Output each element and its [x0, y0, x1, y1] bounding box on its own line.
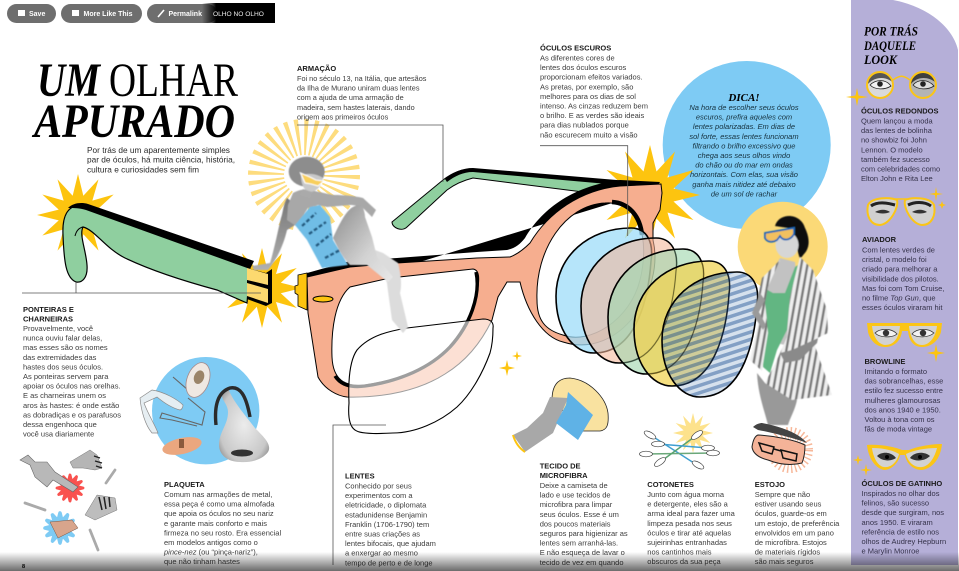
text: óculos redondos: ÓCULOS REDONDOS [861, 106, 939, 116]
text: aviador: visibilidade dos pilotos. [862, 274, 939, 283]
text: estojo: de materiais rígidos [755, 548, 820, 557]
leader line: lentes [333, 425, 386, 565]
tip text: dica: ganha mais nitidez até debaixo [692, 180, 796, 189]
text: armação: da Ilha de Murano uniram duas lentes [297, 84, 420, 93]
torso and bent arm [287, 189, 376, 226]
text: óculos de gatinho: e Marylin Monroe [862, 547, 919, 556]
text: ponteiras e charneiras: dessa engenhoca que [23, 420, 97, 429]
text: ponteiras e charneiras: apoiar os óculos nas orelhas. [23, 382, 121, 391]
yellow stars behind the frame [37, 145, 700, 328]
sidebar heading: POR TRÁS [864, 24, 918, 38]
text: tecido de microfibra: E não esqueça de lavar o [540, 548, 625, 557]
text: estojo: um estojo, de preferência [755, 519, 840, 528]
text: armação [297, 64, 427, 121]
text: aviador: no filme Top Gun, que [862, 294, 936, 302]
text: lentes: tempo de perto e de longe [345, 558, 433, 567]
text: plaqueta: PLAQUETA [164, 480, 205, 489]
big glasses frame [295, 180, 662, 397]
title: APURADO [31, 95, 235, 148]
text: armação: Foi no século 13, na Itália, que artesãos [297, 74, 427, 83]
text: estojo: envolvidos em um pano [755, 528, 834, 537]
text: ponteiras e charneiras: As ponteiras servem para [23, 372, 109, 381]
text: tecido de microfibra [540, 462, 628, 567]
text: estojo: Sempre que não [755, 490, 810, 499]
sidebar heading: DAQUELE [863, 39, 916, 53]
text: óculos escuros: proporcionam efeitos variados. [540, 73, 643, 82]
text: óculos escuros: As diferentes cores de [540, 54, 615, 62]
text: óculos escuros: para dias nublados porque [540, 121, 629, 130]
lens being wiped by hand with cloth [513, 378, 608, 452]
leader line: ponteiras [22, 282, 261, 293]
text: aviador: cristal, o modelo foi [862, 255, 927, 264]
text: cotonetes: limpeza pesada nos seus [647, 519, 732, 528]
text: ponteiras e charneiras: você usa diariamente [23, 430, 94, 439]
tip text: dica: horizontais. Com elas, sua visão [690, 170, 798, 179]
text: tecido de microfibra: tecido de vez em quando [540, 558, 624, 567]
patterned swimsuit [295, 205, 348, 268]
tip text: dica: Na hora de escolher seus óculos [689, 103, 799, 112]
legs [757, 373, 797, 425]
text: óculos redondos: Elton John e Rita Lee [861, 174, 933, 183]
text: óculos de gatinho: anos 1950. E viraram [862, 518, 933, 527]
icon: aviator glasses [868, 198, 934, 225]
text: lentes: Franklin (1706-1790) tem [345, 520, 429, 529]
text: estojo [755, 480, 840, 566]
text: ponteiras e charneiras: nunca ouviu falar delas, [23, 334, 102, 343]
text: aviador: Mas foi com Tom Cruise, [862, 284, 944, 293]
intro text: par de óculos, há muita ciência, história, [87, 155, 235, 165]
icon: browline glasses [867, 323, 942, 347]
text: armação: ARMAÇÃO [297, 64, 336, 73]
arm in pocket [780, 338, 818, 363]
far leg [357, 247, 408, 333]
text: estojo: óculos, guarde-os em [755, 509, 827, 518]
text: cotonetes: óculos e tirar até aquelas [647, 528, 731, 537]
text: estojo: ESTOJO [755, 480, 785, 489]
seated woman photo [252, 157, 408, 333]
text: plaqueta: e garante mais conforto e mais [164, 519, 267, 528]
text: plaqueta [163, 480, 281, 566]
sunburst behind seated woman [266, 137, 342, 213]
text: tecido de microfibra: lentes sem arranhá-las. [540, 539, 618, 548]
text: cotonetes: COTONETES [647, 480, 694, 489]
text: óculos redondos: também fez sucesso [861, 155, 930, 164]
text: armação: madeira, sem hastes laterais, dando [297, 103, 415, 112]
text: óculos de gatinho: ÓCULOS DE GATINHO [862, 479, 942, 488]
text: browline: estilo fez sucesso entre [864, 386, 943, 395]
intro text: cultura e curiosidades sem fim [87, 164, 199, 174]
text: lentes: a enxergar ao mesmo [345, 549, 418, 558]
text: lentes: lentes bifocais, que ajudam [345, 539, 436, 548]
leader line: óculos escuros [540, 146, 628, 236]
text: browline: dos anos 1940 e 1950. [864, 405, 941, 414]
tip text: dica: chega aos seus olhos vindo [698, 151, 790, 160]
text: tecido de microfibra: MICROFIBRA [540, 471, 588, 480]
text: aviador: Com lentes verdes de [862, 246, 935, 254]
sidebar heading [863, 24, 918, 67]
sidebar sparkles [846, 88, 946, 476]
text: browline: BROWLINE [864, 357, 905, 366]
sidebar panel: por trás daquele look [851, 0, 958, 565]
right temple [392, 168, 640, 229]
torso skin [760, 258, 798, 345]
face [776, 232, 798, 258]
icon: round glasses [866, 72, 937, 98]
text: lentes: Conhecido por seus [345, 482, 412, 490]
sunglasses [765, 228, 794, 242]
text: óculos de gatinho: olhos de Audrey Hepburn [862, 537, 946, 546]
hair [775, 216, 809, 259]
text: ponteiras e charneiras: as dobradiças e os parafusos [23, 410, 121, 419]
lens outlines seen through the stack [581, 238, 730, 386]
text: cotonetes [647, 480, 736, 566]
text: tecido de microfibra: TECIDO DE [540, 462, 581, 470]
hinge hardware illustration [20, 450, 117, 550]
green swimsuit [763, 265, 798, 373]
text: cotonetes: sujeirinhas entranhadas [647, 538, 727, 547]
tip text: dica [689, 92, 799, 198]
toolbar buttons [7, 3, 275, 23]
toolbar buttons: Save [29, 11, 45, 18]
leader line: armação [297, 125, 443, 182]
near leg [333, 205, 393, 282]
tip text: dica: lentes polarizadas. Em dias de [693, 122, 795, 131]
text: óculos redondos: com celebridades como [861, 164, 940, 174]
text: estojo: são mais seguros [755, 557, 814, 566]
text: óculos escuros: o brilho. E as verdes são ideais [540, 111, 644, 120]
title: UM [37, 54, 102, 107]
text: ponteiras e charneiras [23, 305, 121, 439]
tip text: dica: do chão ou do mar em ondas [695, 161, 793, 170]
text: óculos escuros: ÓCULOS ESCUROS [540, 44, 611, 52]
text: tecido de microfibra: dos poucos materiais [540, 519, 611, 528]
sunglasses lens stack [556, 228, 758, 397]
text: ponteiras e charneiras: E as charneiras unem os [23, 391, 106, 400]
text: tecido de microfibra: microfibra para limpar [540, 500, 613, 509]
hair and face [289, 157, 325, 187]
text: lentes: entre suas criações as [345, 530, 420, 538]
icon: cat-eye glasses [867, 444, 942, 470]
sidebar heading: LOOK [863, 53, 899, 67]
text: óculos de gatinho: desde que surgiram, nos [862, 508, 944, 517]
text: ponteiras e charneiras: mas esses são os nomes [23, 343, 108, 352]
text: ponteiras e charneiras: PONTEIRAS E [23, 305, 74, 314]
nose pad illustration [140, 357, 269, 464]
text: plaqueta: pince-nez (ou “pinça-nariz”), [164, 548, 258, 557]
text: browline: das sobrancelhas, esse [864, 377, 943, 386]
text: estojo: estiver usando seus [755, 500, 822, 509]
text: lentes: estadunidense Benjamin [345, 510, 427, 519]
text: aviador: esses óculos viraram hit [862, 303, 943, 312]
tip text: dica: filtrando o brilho excessivo que [693, 141, 795, 150]
text: plaqueta: firmeza no seu rosto. Era essencial [164, 528, 281, 537]
yellow circle behind standing woman [738, 202, 828, 292]
bifocal lens outline [349, 319, 493, 434]
striped robe left [750, 260, 780, 371]
left temple: ponteira and hinge [63, 203, 272, 306]
standing woman photo [750, 216, 832, 425]
text: armação: com a ajuda de uma armação de [297, 93, 404, 102]
text: browline: fãs de moda vintage [864, 425, 932, 434]
text: cotonetes: arma ideal para fazer uma [647, 509, 736, 518]
text: aviador: AVIADOR [862, 235, 897, 244]
text: óculos escuros: As pretas, por exemplo, são [540, 82, 633, 91]
text: aviador [862, 235, 944, 312]
tip circle background [663, 61, 831, 229]
text: óculos redondos: no showbiz foi John [861, 136, 927, 145]
text: tecido de microfibra: Deixe a camiseta de [540, 481, 608, 490]
text: cotonetes: e detergente, eles são a [647, 500, 729, 509]
text: browline [864, 357, 943, 434]
text: plaqueta: que não tinham hastes [164, 557, 240, 566]
glasses case [752, 423, 807, 467]
text: armação: origem aos primeiros óculos [297, 112, 389, 121]
text: lentes [345, 472, 436, 567]
text: óculos escuros: melhores para os dias de sol [540, 92, 636, 101]
tip text: dica: escuros, prefira aqueles com [696, 113, 792, 122]
text: plaqueta: Comum nas armações de metal, [164, 490, 272, 499]
text: tecido de microfibra: seus óculos. Esse é um [540, 510, 619, 519]
title: OLHAR [109, 54, 238, 107]
text: óculos redondos: Quem lançou a moda [861, 116, 934, 126]
intro text: Por trás de um aparentemente simples [87, 145, 230, 155]
text: óculos de gatinho: referência de estilo nos [862, 527, 939, 536]
arm on hinge [252, 198, 296, 270]
text: plaqueta: essa peça é como uma almofada [164, 500, 275, 509]
text: plaqueta: que apoia os óculos no seu nariz [164, 509, 274, 518]
text: aviador: criado para melhorar a [862, 265, 938, 274]
sparkles near hand [499, 351, 522, 376]
toolbar buttons: Permalink [168, 11, 202, 18]
text: browline: Voltou à tona com os [864, 415, 935, 424]
striped robe right [765, 257, 832, 400]
text: cotonetes: nos cantinhos mais [647, 548, 712, 557]
text: óculos de gatinho [862, 479, 946, 556]
text: ponteiras e charneiras: CHARNEIRAS [23, 315, 73, 324]
text: cotonetes: Junto com água morna [647, 490, 725, 499]
text: óculos de gatinho: Inspirados no olhar dos [862, 489, 940, 498]
text: óculos escuros: lentes dos óculos escuros [540, 63, 627, 72]
toolbar buttons: More Like This [84, 11, 133, 18]
text: ponteiras e charneiras: aros às hastes: é onde estão [23, 401, 119, 410]
toolbar buttons: OLHO NO OLHO [213, 11, 264, 18]
text: browline: mulheres glamourosas [864, 396, 941, 405]
tip text: dica: sol forte, essas lentes funcionam [689, 132, 799, 141]
text: ponteiras e charneiras: das extremidades das [23, 353, 97, 362]
text: tecido de microfibra: lado e use tecidos de [540, 491, 611, 500]
text: óculos redondos: das lentes de bolinha [861, 126, 933, 135]
text: óculos de gatinho: felinos, são sucesso [862, 499, 929, 508]
text: plaqueta: em modelos antigos como o [164, 538, 258, 547]
text: lentes: LENTES [345, 472, 375, 480]
cotton swabs [640, 413, 720, 471]
text: cotonetes: obscuros da sua peça [647, 557, 722, 566]
text: tecido de microfibra: seguros para higienizar as [540, 529, 628, 538]
page number: 8 [22, 564, 25, 570]
text: óculos escuros [540, 44, 648, 139]
title [31, 54, 238, 148]
bottom page shadow [0, 552, 959, 571]
text: ponteiras e charneiras: hastes dos seus óculos. [23, 362, 103, 371]
tip text: dica: de um sol de rachar [711, 189, 778, 198]
text: estojo: de microfibra. Estojos [755, 538, 827, 547]
text: óculos redondos [861, 106, 940, 183]
text: lentes: experimentos com a [345, 491, 413, 500]
text: ponteiras e charneiras: Provavelmente, você [23, 324, 93, 333]
text: lentes: eletricidade, o diplomata [345, 501, 427, 510]
text: óculos escuros: intenso. As cinzas reduzem bem [540, 102, 648, 110]
tip text: dica: DICA! [727, 92, 760, 104]
text: óculos escuros: não escurecem muito a visão [540, 130, 638, 139]
text: browline: Imitando o formato [864, 367, 927, 376]
text: óculos redondos: Lennon. O modelo [861, 145, 923, 154]
